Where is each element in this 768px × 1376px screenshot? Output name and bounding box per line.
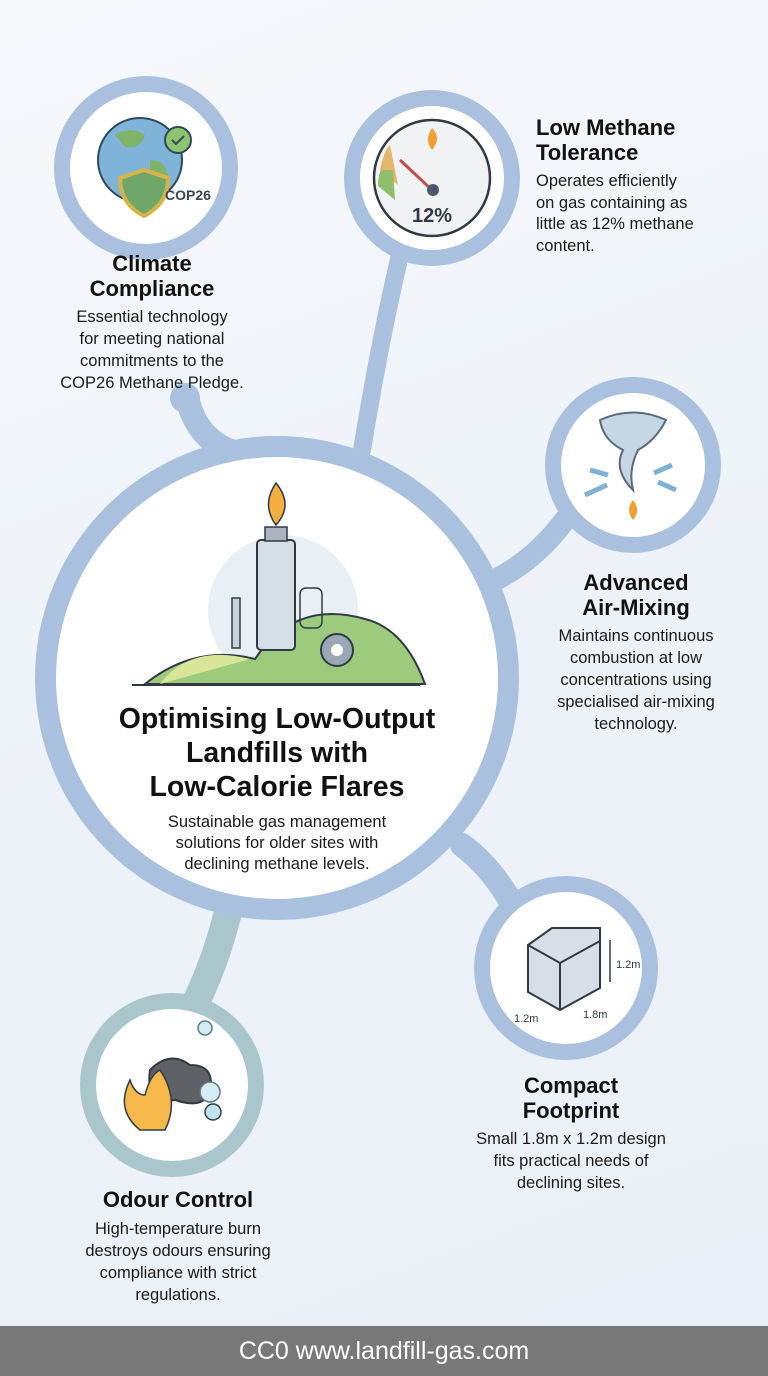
- text: advanced air-mixing: concentrations using: [560, 671, 712, 689]
- text: low methane tolerance: little as 12% methane: [536, 215, 694, 233]
- text: low methane tolerance: Operates efficiently: [536, 172, 677, 190]
- compact circle: [474, 876, 658, 1060]
- gauge circle: [344, 90, 520, 266]
- text: low methane tolerance: Low Methane: [536, 115, 675, 140]
- subtitle: solutions for older sites with: [176, 834, 378, 852]
- main title: [119, 703, 435, 803]
- text: compact footprint: fits practical needs of: [494, 1152, 648, 1170]
- compact circle: 1.2m: [514, 1013, 538, 1025]
- text: odour control: High-temperature burn: [95, 1220, 261, 1238]
- footer: [0, 1326, 768, 1376]
- text: advanced air-mixing: [557, 570, 715, 733]
- text: advanced air-mixing: combustion at low: [570, 649, 702, 667]
- footer: CC0 www.landfill-gas.com: [239, 1337, 529, 1365]
- climate circle: COP26: [165, 187, 211, 203]
- text: advanced air-mixing: Maintains continuous: [558, 627, 714, 645]
- odour circle: [80, 993, 264, 1177]
- text: odour control: destroys odours ensuring: [85, 1242, 271, 1260]
- subtitle: Sustainable gas management: [168, 813, 386, 831]
- text: compact footprint: Compact: [524, 1073, 618, 1098]
- text: odour control: compliance with strict: [100, 1264, 256, 1282]
- air-mixing circle: [545, 377, 721, 553]
- compact circle: 1.2m: [616, 959, 640, 971]
- text: odour control: [85, 1187, 271, 1304]
- text: compact footprint: declining sites.: [517, 1174, 625, 1192]
- text: low methane tolerance: Tolerance: [536, 140, 638, 165]
- text: odour control: Odour Control: [103, 1187, 253, 1212]
- text: climate compliance: Essential technology: [76, 308, 228, 326]
- subtitle: [168, 813, 386, 873]
- text: compact footprint: Footprint: [523, 1098, 619, 1123]
- center circle: [35, 436, 519, 920]
- text: climate compliance: Climate: [112, 251, 192, 276]
- gauge circle: 12%: [412, 205, 452, 227]
- text: advanced air-mixing: Advanced: [583, 570, 689, 595]
- text: climate compliance: Compliance: [90, 276, 214, 301]
- text: low methane tolerance: content.: [536, 236, 595, 254]
- text: climate compliance: COP26 Methane Pledge.: [60, 374, 244, 392]
- text: climate compliance: [60, 251, 244, 392]
- main title: Low-Calorie Flares: [150, 771, 404, 803]
- text: climate compliance: commitments to the: [80, 352, 224, 370]
- text: low methane tolerance: [536, 115, 694, 254]
- text: advanced air-mixing: Air-Mixing: [582, 595, 690, 620]
- text: advanced air-mixing: technology.: [594, 715, 678, 733]
- text: odour control: regulations.: [135, 1286, 221, 1304]
- text: climate compliance: for meeting national: [80, 330, 224, 348]
- compact circle: 1.8m: [583, 1009, 607, 1021]
- climate circle: [54, 76, 238, 260]
- main title: Landfills with: [186, 737, 368, 769]
- text: advanced air-mixing: specialised air-mixing: [557, 693, 715, 711]
- subtitle: declining methane levels.: [184, 855, 370, 873]
- text: low methane tolerance: on gas containing as: [536, 194, 687, 212]
- main title: Optimising Low-Output: [119, 703, 435, 735]
- text: compact footprint: [476, 1073, 666, 1192]
- text: compact footprint: Small 1.8m x 1.2m design: [476, 1130, 666, 1148]
